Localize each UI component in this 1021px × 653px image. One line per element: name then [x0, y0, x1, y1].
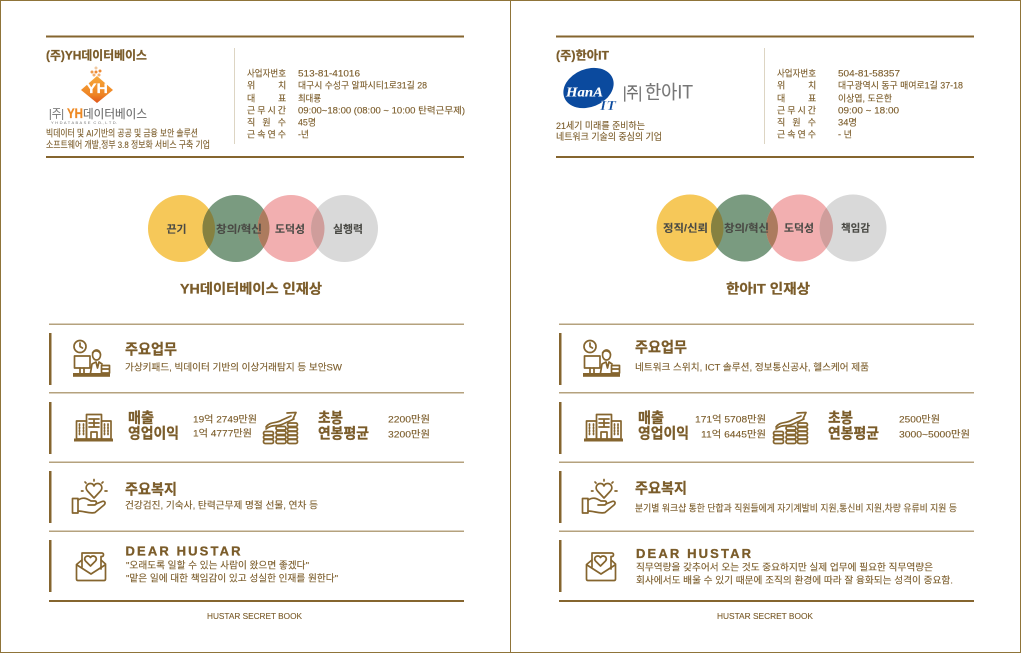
venn diagram: YH talent values: 끈기	[166, 222, 186, 236]
company facts table: 이상엽, 도은한	[838, 94, 892, 104]
company facts table: 치	[278, 80, 286, 90]
company facts table: 근속연수	[777, 130, 816, 140]
company facts table: 09:00~18:00 (08:00 ~ 10:00 탄력근무제)	[298, 104, 465, 116]
company facts table: 근속연수	[247, 130, 286, 140]
section: benefits: 건강검진, 기숙사, 탄력근무제 명절 선물, 연차 등	[125, 500, 318, 512]
section: dear hustar: 회사에서도 배울 수 있기 때문에 조직의 환경에 따라 잘 융화되는 성격이 중요함.	[636, 574, 953, 586]
section: revenue and salary	[49, 402, 430, 454]
company facts table: 45명	[298, 118, 316, 128]
company facts table: 사업자번호	[247, 68, 286, 78]
section: revenue and salary: 매출	[638, 410, 664, 427]
icon: envelope with heart	[76, 553, 106, 580]
company facts table: 504-81-58357	[838, 68, 900, 78]
company facts table: 표	[808, 94, 816, 104]
venn diagram: Hana IT talent values	[656, 194, 886, 262]
logo: Hana IT: HanA	[565, 86, 603, 100]
company facts table: -년	[298, 130, 309, 140]
company facts table: 대	[247, 94, 255, 104]
venn diagram: YH talent values: 창의/혁신	[216, 222, 262, 236]
section: revenue and salary: 초봉	[828, 410, 853, 427]
section: main work: 주요업무	[635, 340, 687, 356]
venn diagram: Hana IT talent values: 창의/혁신	[724, 222, 769, 234]
panel: YH database page	[46, 36, 465, 621]
logo: YH database: 데이터베이스	[83, 107, 147, 121]
venn diagram: Hana IT talent values: 정직/신뢰	[663, 222, 708, 234]
section: revenue and salary: 11억 6445만원	[701, 428, 766, 440]
section: revenue and salary: 연봉평균	[828, 426, 879, 442]
company name: (주)YH데이터베이스	[46, 48, 147, 62]
section: main work	[49, 333, 342, 385]
company facts table: 사업자번호	[777, 68, 816, 78]
section: dear hustar: DEAR HUSTAR	[126, 544, 241, 558]
section: revenue and salary: 2500만원	[899, 414, 940, 426]
footer: HUSTAR SECRET BOOK	[717, 611, 813, 621]
section: benefits	[49, 471, 318, 523]
company facts table: 근무시간	[777, 106, 816, 116]
logo: Hana IT	[557, 61, 693, 115]
icon: office building	[584, 414, 623, 442]
talent heading: YH데이터베이스 인재상	[180, 282, 323, 296]
company facts table: 34명	[838, 118, 857, 128]
company facts table: 직원수	[247, 118, 286, 128]
section: revenue and salary: 19억 2749만원	[193, 414, 257, 426]
section: benefits: 분기별 워크샵 통한 단합과 직원들에게 자기계발비 지원,통신비 지원,차량 유류비 지원 등	[635, 502, 957, 514]
company facts table: 근무시간	[247, 106, 286, 116]
logo: YH database: Y H D A T A B A S E C O., L T D.	[51, 120, 117, 125]
section: main work: 네트워크 스위치, ICT 솔루션, 정보통신공사, 헬스케어 제품	[635, 362, 869, 374]
section: revenue and salary: 2200만원	[388, 414, 430, 426]
footer: HUSTAR SECRET BOOK	[207, 611, 302, 621]
company facts table: 치	[808, 80, 816, 90]
section: revenue and salary: 3200만원	[388, 430, 430, 440]
company description	[556, 120, 662, 143]
logo: Hana IT: |주|	[623, 85, 642, 102]
company description: 빅데이터 및 AI기반의 공공 및 금융 보안 솔루션	[46, 128, 198, 140]
logo: YH database: YH	[67, 105, 83, 121]
company facts table: 대	[777, 94, 785, 104]
company facts table: 513-81-41016	[298, 68, 360, 78]
section: revenue and salary: 3000~5000만원	[899, 430, 970, 440]
logo: Hana IT: 한아IT	[645, 82, 693, 104]
icon: coins and growth arrow	[774, 412, 808, 444]
company facts table: 위	[247, 80, 255, 90]
icon: hand holding heart	[582, 480, 617, 513]
venn diagram: YH talent values	[148, 195, 378, 262]
company facts table	[247, 68, 465, 140]
panel: Hana IT page	[556, 36, 974, 621]
company facts table: 최대룡	[298, 94, 321, 104]
logo: YH database: YH	[86, 80, 108, 96]
section: dear hustar: DEAR HUSTAR	[636, 546, 752, 561]
company name: (주)한아IT	[556, 48, 610, 62]
section: dear hustar: "오래도록 일할 수 있는 사람이 왔으면 좋겠다"	[126, 560, 309, 572]
section: dear hustar: 직무역량을 갖추어서 오는 것도 중요하지만 실제 업무에 필요한 직무역량은	[636, 562, 933, 574]
company facts table: 09:00 ~ 18:00	[838, 106, 899, 116]
company facts table: 표	[278, 94, 286, 104]
section: main work	[559, 333, 869, 385]
logo: YH database	[49, 66, 147, 125]
venn diagram: Hana IT talent values: 도덕성	[784, 222, 814, 234]
company facts table: 대구시 수성구 알파시티1로31길 28	[298, 80, 427, 90]
company description	[46, 128, 210, 151]
company facts table	[777, 68, 963, 140]
company header: YH database	[46, 36, 465, 158]
section: benefits: 주요복지	[635, 480, 687, 498]
section: dear hustar	[49, 540, 338, 592]
venn diagram: YH talent values: 도덕성	[275, 222, 305, 236]
icon: envelope with heart	[586, 553, 616, 580]
section: benefits	[559, 471, 957, 523]
section rules	[49, 324, 464, 602]
section: revenue and salary: 초봉	[318, 410, 343, 427]
company facts table: 위	[777, 80, 785, 90]
icon: office building	[74, 414, 113, 442]
section: main work: 주요업무	[125, 342, 177, 358]
section: revenue and salary: 매출	[128, 410, 154, 427]
logo: Hana IT: IT	[599, 99, 618, 114]
section: revenue and salary	[559, 402, 970, 454]
icon: worker at desk	[583, 340, 620, 377]
section: main work: 가상키패드, 빅데이터 기반의 이상거래탐지 등 보안SW	[125, 362, 342, 374]
section: revenue and salary: 1억 4777만원	[193, 428, 252, 440]
section: revenue and salary: 연봉평균	[318, 426, 369, 442]
section: revenue and salary: 영업이익	[638, 426, 689, 442]
company facts table: 대구광역시 동구 매여로1길 37-18	[838, 80, 963, 90]
talent heading: 한아IT 인재상	[726, 282, 811, 296]
section rules	[559, 324, 974, 602]
section: dear hustar: "맡은 일에 대한 책임감이 있고 성실한 인재를 원한다"	[126, 572, 338, 584]
logo: YH database: |주|	[49, 106, 64, 120]
icon: coins and growth arrow	[264, 412, 298, 444]
venn diagram: YH talent values: 실행력	[333, 222, 363, 236]
section: benefits: 주요복지	[125, 482, 177, 498]
company header: Hana IT	[556, 36, 974, 158]
icon: hand holding heart	[72, 480, 107, 513]
company description: 21세기 미래를 준비하는	[556, 120, 645, 132]
company facts table: 직원수	[777, 118, 816, 128]
section: dear hustar	[559, 540, 953, 592]
company description: 네트워크 기술의 중심의 기업	[556, 131, 662, 143]
company facts table: - 년	[838, 130, 852, 140]
section: revenue and salary: 영업이익	[128, 426, 179, 442]
venn diagram: Hana IT talent values: 책임감	[841, 222, 870, 234]
icon: worker at desk	[73, 340, 110, 377]
company description: 소프트웨어 개발,정부 3.8 정보화 서비스 구축 기업	[46, 139, 210, 151]
section: revenue and salary: 171억 5708만원	[695, 414, 766, 426]
